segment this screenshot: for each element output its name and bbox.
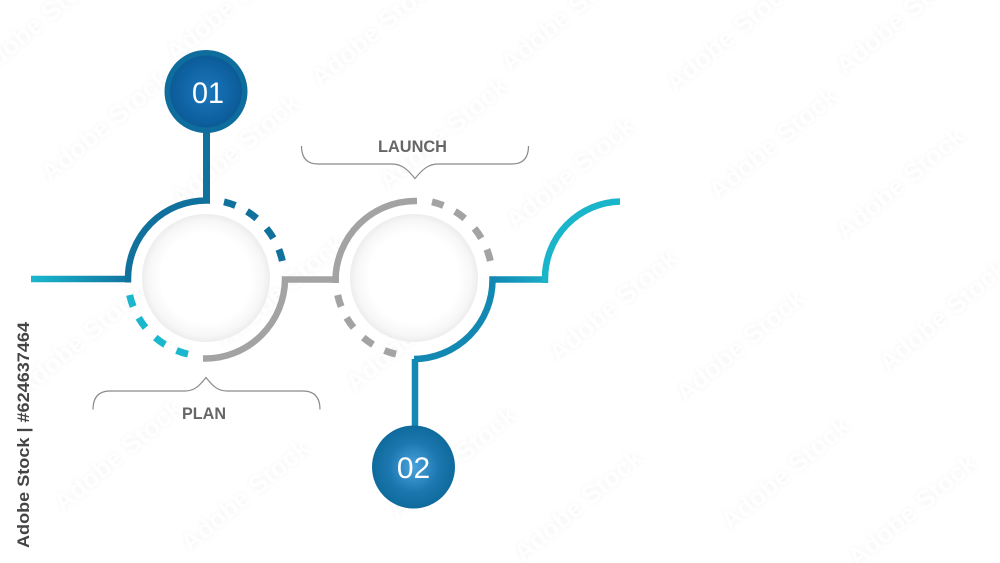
watermark pattern: Adobe Stock — [499, 110, 641, 236]
right connector line — [495, 276, 545, 283]
blue dashes — [224, 202, 283, 261]
watermark pattern: Adobe Stock — [829, 120, 971, 246]
cyan rising arc — [545, 202, 620, 283]
gray arc around launch circle — [336, 201, 417, 283]
left connector line — [31, 276, 128, 282]
gray dashes — [337, 202, 491, 354]
badge 02 — [372, 426, 455, 508]
watermark pattern: Adobe Stock — [339, 272, 481, 398]
watermark pattern: Adobe Stock — [9, 277, 151, 403]
launch inner circle — [350, 214, 478, 342]
brace: plan — [93, 378, 320, 410]
plan inner circle — [142, 214, 270, 342]
watermark pattern: Adobe Stock — [47, 392, 189, 518]
watermark pattern: Adobe Stock — [209, 227, 351, 353]
brace: launch — [302, 146, 528, 178]
badge 02: 02 — [397, 452, 430, 485]
circle group: launch — [336, 201, 496, 430]
badge 01 — [164, 50, 248, 133]
watermark pattern: Adobe Stock — [542, 242, 684, 368]
gray arc below plan circle — [203, 280, 339, 358]
label: plan: PLAN — [182, 404, 226, 423]
watermark pattern: Adobe Stock — [381, 399, 523, 525]
blue arc around launch circle — [414, 280, 496, 430]
badge 01: 01 — [192, 77, 224, 110]
side credit text: Adobe Stock | #624637464 — [14, 321, 33, 548]
watermark pattern: Adobe Stock — [164, 87, 306, 213]
watermark pattern: Adobe Stock — [669, 282, 811, 408]
watermark pattern: Adobe Stock — [174, 432, 316, 558]
watermark pattern: Adobe Stock — [714, 410, 856, 536]
blue arc around plan circle — [128, 200, 210, 282]
cyan dashes — [129, 295, 188, 354]
watermark pattern: Adobe Stock — [372, 70, 514, 196]
connector stem for badge 01 — [203, 128, 210, 203]
circle group: plan — [31, 200, 339, 358]
watermark pattern: Adobe Stock — [702, 80, 844, 206]
watermark pattern: Adobe Stock — [34, 62, 176, 188]
label: launch: LAUNCH — [378, 137, 447, 156]
